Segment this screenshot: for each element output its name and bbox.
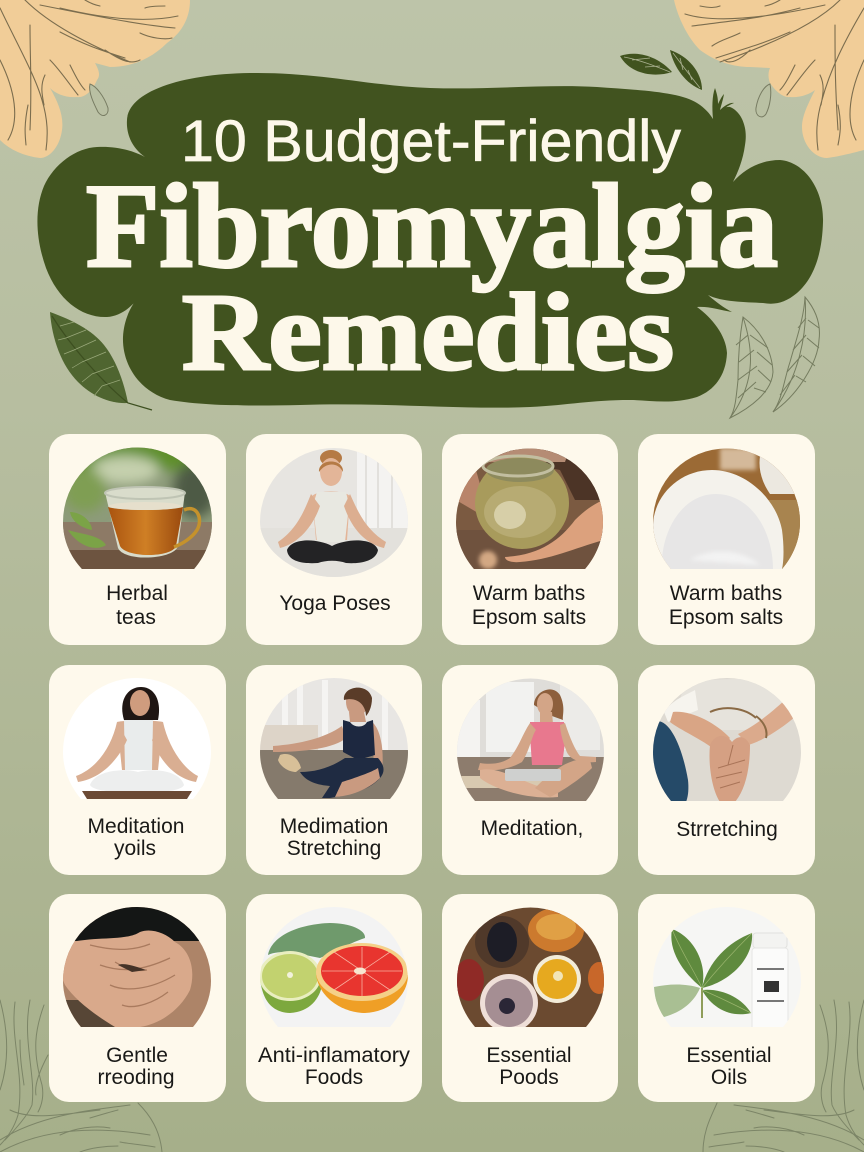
image: leaves and bottle (654, 930, 788, 1027)
label: Essential (486, 1044, 572, 1067)
card: anti-inflammatory foods (246, 894, 422, 1102)
card: warm baths 2 (638, 434, 815, 645)
card: herbal teas (49, 434, 226, 645)
card: warm baths 1: Epsom salts (472, 606, 586, 629)
corner foliage: bottom right (703, 1000, 864, 1152)
corner leaf: top left (0, 0, 190, 158)
label: Meditation, (481, 817, 583, 840)
card: medimation stretching (246, 665, 422, 875)
title banner blob (37, 73, 823, 408)
card: essential oils (638, 894, 815, 1102)
image: meditating woman (60, 675, 216, 801)
title text: Remedies (182, 271, 674, 393)
card: essential poods (442, 894, 618, 1102)
image: hands clasped (650, 675, 804, 803)
label: Anti-inflamatory (258, 1044, 411, 1067)
label: Yoga Poses (279, 592, 391, 615)
leaf: banner lower left (50, 312, 152, 410)
label: Strretching (676, 818, 778, 841)
card: essential poods: Poods (499, 1066, 559, 1089)
card: gentle rreoding: rreoding (97, 1066, 175, 1089)
card: warm baths 1 (442, 434, 618, 645)
image: jar of salts (455, 445, 606, 571)
label: Warm baths (670, 582, 782, 605)
label: Medimation (280, 815, 388, 838)
label: Herbal (106, 582, 168, 605)
title text: 10 Budget-Friendly (181, 109, 681, 174)
card: essential oils: Oils (711, 1066, 747, 1089)
title text (86, 109, 778, 393)
title text: Fibromyalgia (86, 159, 778, 293)
card: gentle rreoding (49, 894, 226, 1102)
image: yoga seated woman (260, 448, 408, 578)
card: warm baths 2: Epsom salts (669, 606, 783, 629)
card: stretching (638, 665, 815, 875)
card: meditation (442, 665, 618, 875)
card: yoga poses (246, 434, 422, 645)
card: herbal teas: teas (116, 606, 156, 629)
label: Warm baths (473, 582, 585, 605)
image: bowl of epsom salt (650, 445, 804, 571)
corner foliage: bottom left (0, 1000, 162, 1152)
outline leaves: banner lower right (730, 297, 819, 418)
label: Gentle (106, 1044, 168, 1067)
image: woman in pink top (455, 675, 607, 803)
decorative leaves: top right of banner (620, 50, 734, 119)
image: tea cup (63, 448, 212, 569)
label: Meditation (88, 815, 184, 838)
image: folded hands (59, 905, 216, 1030)
image: citrus fruit (258, 905, 410, 1029)
label: Essential (686, 1044, 772, 1067)
card: medimation stretching: Stretching (287, 837, 381, 860)
card: anti-inflammatory foods: Foods (305, 1066, 363, 1089)
image: stretching woman (258, 675, 410, 802)
image: spice bowls (457, 908, 604, 1027)
card: meditation yoils: yoils (114, 837, 156, 860)
card: meditation yoils (49, 665, 226, 875)
corner leaf: top right (674, 0, 864, 158)
